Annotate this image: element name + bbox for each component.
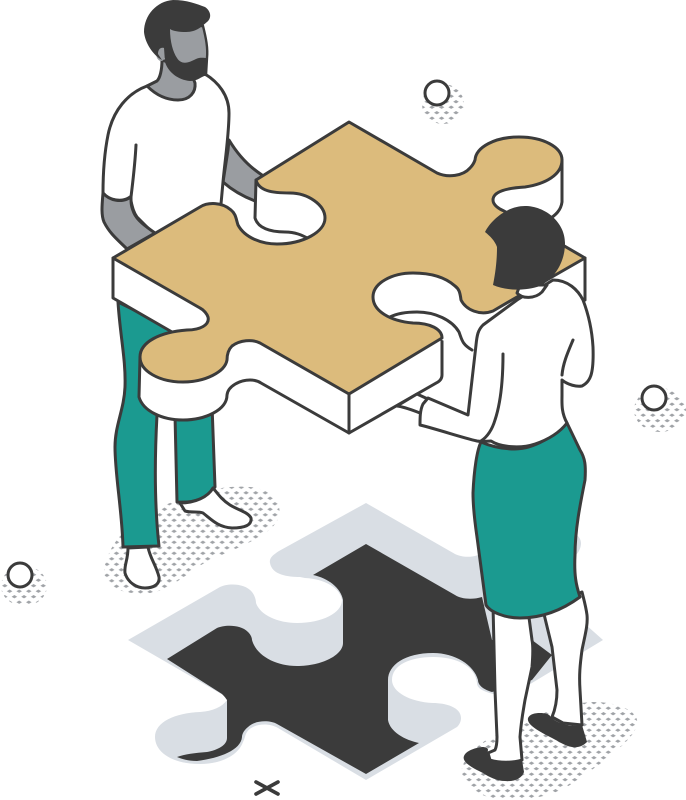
- halftone shadow: top circle: [422, 84, 464, 124]
- woman: [397, 206, 593, 781]
- man: ear: [156, 45, 166, 61]
- man: left forearm: [102, 193, 155, 249]
- puzzle: front wall line: [139, 338, 442, 433]
- man: right foot: [180, 488, 251, 528]
- man: shirt: [103, 74, 229, 240]
- man: face: [166, 26, 207, 75]
- woman: arm fold line: [562, 340, 573, 375]
- puzzle: left wall line: [113, 258, 172, 332]
- woman: hair: [485, 206, 565, 290]
- woman: skirt: [473, 423, 585, 618]
- puzzle: front corner edge: [348, 394, 350, 433]
- puzzle: left wall fill: [113, 258, 208, 332]
- man: right forearm: [223, 140, 262, 201]
- man: right pant leg: [175, 405, 215, 502]
- halftone shadow: man: [104, 487, 280, 593]
- woman: left leg: [488, 605, 533, 762]
- puzzle: gold top face: [113, 122, 585, 394]
- floor: light puzzle recess: [128, 503, 603, 780]
- man: neck: [147, 60, 195, 100]
- decorative ring: right: [642, 386, 666, 410]
- woman: right leg: [543, 592, 587, 725]
- woman: left shoe: [464, 747, 524, 781]
- man: hair: [144, 0, 210, 81]
- puzzle: right corner edge: [584, 258, 586, 300]
- man: shirt sleeve line: [131, 145, 136, 197]
- puzzle: upper notch wall line: [255, 180, 309, 239]
- man: [102, 0, 262, 588]
- decorative ring: top: [425, 81, 449, 105]
- woman: back line: [481, 354, 503, 441]
- halftone shadow: right circle: [634, 388, 686, 432]
- puzzle: front wall fill: [139, 338, 442, 433]
- woman: right shoe: [528, 713, 587, 747]
- floor: dark puzzle hole: [167, 544, 552, 774]
- man: left foot: [125, 547, 159, 588]
- puzzle: right tab wall line: [548, 160, 562, 220]
- woman: torso and arm: [420, 280, 593, 447]
- woman: back hand: [397, 394, 430, 414]
- puzzle piece: [113, 122, 585, 433]
- puzzle: right tab wall fill: [493, 160, 562, 220]
- halftone shadow: left circle: [1, 566, 47, 606]
- woman: collar: [517, 285, 547, 297]
- puzzle: inner notch fill: [373, 273, 472, 352]
- decorative ring: left: [8, 563, 32, 587]
- puzzle: inner notch wall line: [390, 312, 472, 350]
- decorative cross: [256, 782, 278, 794]
- man: left pant leg: [115, 302, 175, 547]
- puzzle: upper notch fill: [255, 180, 327, 246]
- halftone shadow: woman: [462, 702, 637, 800]
